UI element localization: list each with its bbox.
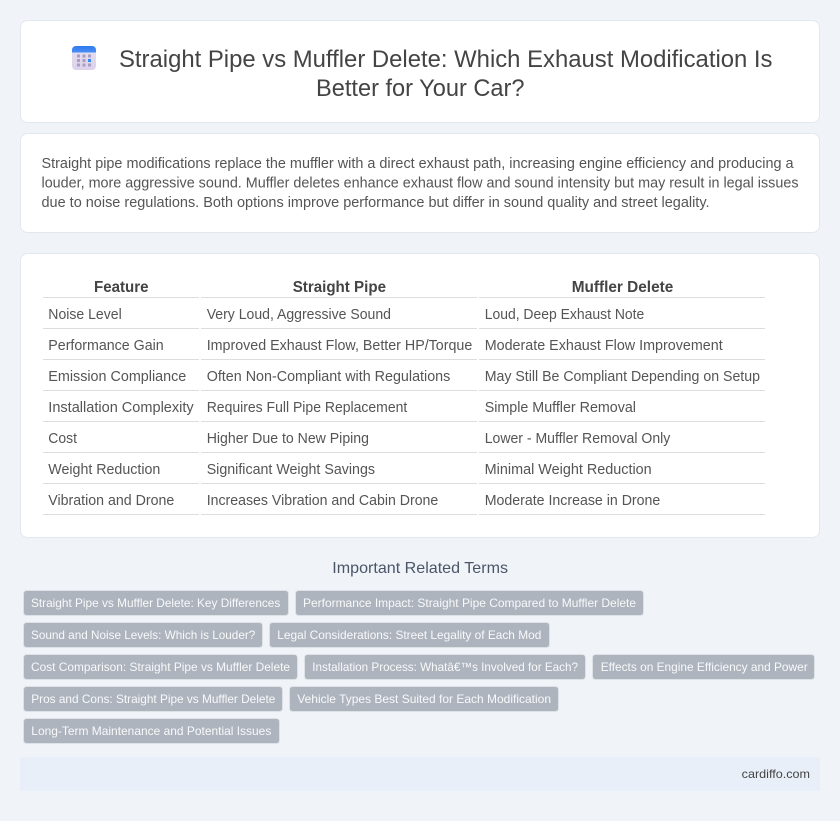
tag: legal considerations: Legal Considerations: Street Legality of Each Mod (277, 628, 541, 642)
tag: key differences (24, 590, 288, 616)
tag: vehicle types (290, 686, 558, 712)
panel: comparison table (20, 254, 820, 538)
tag: cost comparison (24, 654, 298, 680)
table header row (43, 279, 765, 298)
tag: long-term maintenance: Long-Term Maintenance and Potential Issues (31, 724, 271, 738)
table row: noise level: Noise Level (48, 307, 122, 323)
table row: noise level: Loud, Deep Exhaust Note (485, 307, 644, 323)
section: important related terms (24, 560, 814, 744)
panel: header (20, 20, 820, 122)
footer (20, 757, 820, 791)
table row: performance gain: Performance Gain (48, 338, 164, 354)
table row: cost: Higher Due to New Piping (207, 431, 369, 447)
title (119, 46, 772, 102)
table row: emission compliance (43, 369, 765, 391)
table row: emission compliance: May Still Be Compliant Depending on Setup (485, 369, 760, 385)
tag: pros and cons (24, 686, 282, 712)
table header row: Muffler Delete (572, 279, 673, 296)
tag: key differences: Straight Pipe vs Muffler Delete: Key Differences (31, 596, 280, 610)
table row: vibration and drone: Vibration and Drone (48, 493, 174, 509)
intro text block: Straight pipe modifications replace the muffler with a direct exhaust path, increasing engine efficiency and producing a (42, 156, 794, 172)
table row: weight reduction (43, 462, 765, 484)
footer source text: cardiffo.com (742, 767, 810, 781)
table row: vibration and drone (43, 493, 765, 515)
table row: noise level: Very Loud, Aggressive Sound (207, 307, 391, 323)
tag: performance impact (296, 590, 644, 616)
table row: cost (43, 431, 765, 453)
tag: sound and noise (24, 622, 262, 648)
table row: vibration and drone: Moderate Increase in Drone (485, 493, 660, 509)
table row: installation complexity: Simple Muffler Removal (485, 400, 636, 416)
table row: emission compliance: Often Non-Compliant with Regulations (207, 369, 450, 385)
icon: calendar (72, 46, 96, 70)
table row: weight reduction: Significant Weight Savings (207, 462, 375, 478)
tag: installation process: Installation Process: Whatâ€™s Involved for Each? (312, 660, 578, 674)
title: Straight Pipe vs Muffler Delete: Which Exhaust Modification Is (119, 46, 772, 73)
table row: performance gain (43, 338, 765, 360)
intro text block: louder, more aggressive sound. Muffler deletes enhance exhaust flow and sound intensity but may result in legal issues (42, 176, 798, 192)
tag: vehicle types: Vehicle Types Best Suited for Each Modification (297, 692, 551, 706)
table row: noise level (43, 307, 765, 329)
table row: performance gain: Moderate Exhaust Flow Improvement (485, 338, 723, 354)
tag: pros and cons: Pros and Cons: Straight Pipe vs Muffler Delete (31, 692, 276, 706)
tag: performance impact: Performance Impact: Straight Pipe Compared to Muffler Delete (303, 596, 636, 610)
panel: introduction (20, 134, 820, 232)
tag: engine efficiency: Effects on Engine Efficiency and Power (601, 660, 808, 674)
tag: cost comparison: Cost Comparison: Straight Pipe vs Muffler Delete (31, 660, 290, 674)
table row: installation complexity: Installation Complexity (48, 400, 194, 416)
table row: weight reduction: Weight Reduction (48, 462, 160, 478)
table row: cost: Lower - Muffler Removal Only (485, 431, 671, 447)
table row: emission compliance: Emission Compliance (48, 369, 186, 385)
tag: sound and noise: Sound and Noise Levels: Which is Louder? (31, 628, 256, 642)
table row: installation complexity (43, 400, 765, 422)
table row: cost: Cost (48, 431, 77, 447)
table header row: Feature (94, 279, 149, 296)
table row: installation complexity: Requires Full Pipe Replacement (207, 400, 407, 416)
title: Better for Your Car? (316, 75, 524, 102)
table row: performance gain: Improved Exhaust Flow, Better HP/Torque (207, 338, 472, 354)
table header row: Straight Pipe (293, 279, 386, 296)
table row: weight reduction: Minimal Weight Reduction (485, 462, 652, 478)
tag: long-term maintenance (24, 718, 280, 744)
intro text block (42, 156, 798, 211)
tag: engine efficiency (592, 654, 814, 680)
tag: legal considerations (270, 622, 550, 648)
table row: vibration and drone: Increases Vibration and Cabin Drone (207, 493, 438, 509)
section heading: Important Related Terms (332, 560, 508, 577)
tag: installation process (304, 654, 586, 680)
intro text block: due to noise regulations. Both options improve performance but differ in sound quality and street legality. (42, 195, 710, 211)
